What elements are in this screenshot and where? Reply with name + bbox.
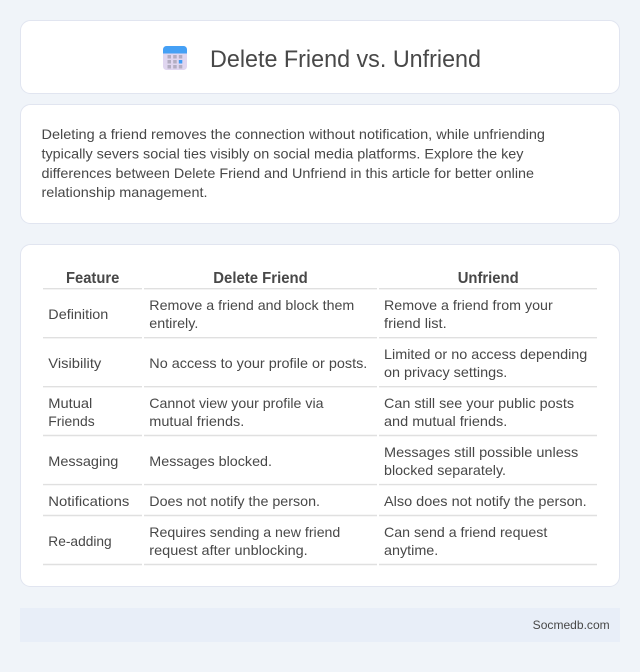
table row: definition: Remove a friend from your — [384, 297, 553, 313]
text block: introduction paragraph: Deleting a friend removes the connection without notification, while unfriending — [42, 126, 545, 142]
table row: re-adding: Re-adding — [48, 533, 112, 549]
panel: comparison table — [20, 244, 620, 586]
footer text: Socmedb.com — [533, 618, 610, 632]
table row: re-adding: Requires sending a new friend — [149, 524, 340, 540]
table row: definition: friend list. — [384, 315, 447, 331]
table row: mutual friends: Mutual — [48, 395, 92, 411]
table row: definition: Remove a friend and block them — [149, 297, 354, 313]
table row: messaging: Messaging — [48, 453, 118, 469]
text block: introduction paragraph: relationship management. — [42, 184, 208, 200]
panel: title card — [20, 20, 620, 94]
table header row: Unfriend — [458, 270, 519, 287]
text block: introduction paragraph — [42, 126, 545, 200]
table row: re-adding — [43, 524, 597, 564]
table row: messaging — [43, 444, 597, 485]
table row: notifications: Does not notify the person. — [149, 493, 320, 509]
table header row: Feature — [66, 270, 119, 287]
table row: mutual friends: Friends — [48, 413, 95, 429]
table row: re-adding: request after unblocking. — [149, 542, 308, 558]
table row: messaging: blocked separately. — [384, 462, 506, 478]
table row: re-adding: Can send a friend request — [384, 524, 547, 540]
table row: mutual friends: mutual friends. — [149, 413, 244, 429]
table row: visibility: Limited or no access depending — [384, 346, 587, 362]
table row: visibility: on privacy settings. — [384, 364, 507, 380]
table header row — [43, 270, 597, 289]
table row: mutual friends: Can still see your public posts — [384, 395, 574, 411]
text block: introduction paragraph: differences between Delete Friend and Unfriend in this article for better online — [42, 165, 534, 181]
footer bar — [20, 608, 620, 642]
table row: re-adding: anytime. — [384, 542, 438, 558]
table row: definition: Definition — [48, 306, 108, 322]
table row: mutual friends: Cannot view your profile via — [149, 395, 324, 411]
table row: definition: entirely. — [149, 315, 198, 331]
title: Delete Friend vs. Unfriend — [210, 46, 481, 73]
table row: visibility — [43, 346, 597, 387]
table row: mutual friends: and mutual friends. — [384, 413, 507, 429]
table row: visibility: No access to your profile or posts. — [149, 355, 367, 371]
table header row: Delete Friend — [213, 270, 308, 287]
table row: notifications — [43, 493, 597, 516]
icon: calendar — [163, 46, 187, 70]
table row: messaging: Messages still possible unless — [384, 444, 578, 460]
text block: introduction paragraph: typically severs social ties visibly on social media platforms. Explore the key — [42, 146, 524, 162]
panel: introduction — [20, 104, 620, 224]
table row: notifications: Also does not notify the person. — [384, 493, 587, 509]
table row: mutual friends — [43, 395, 597, 436]
table row: notifications: Notifications — [48, 493, 129, 509]
table row: visibility: Visibility — [48, 355, 101, 371]
table row: messaging: Messages blocked. — [149, 453, 272, 469]
table row: definition — [43, 297, 597, 338]
